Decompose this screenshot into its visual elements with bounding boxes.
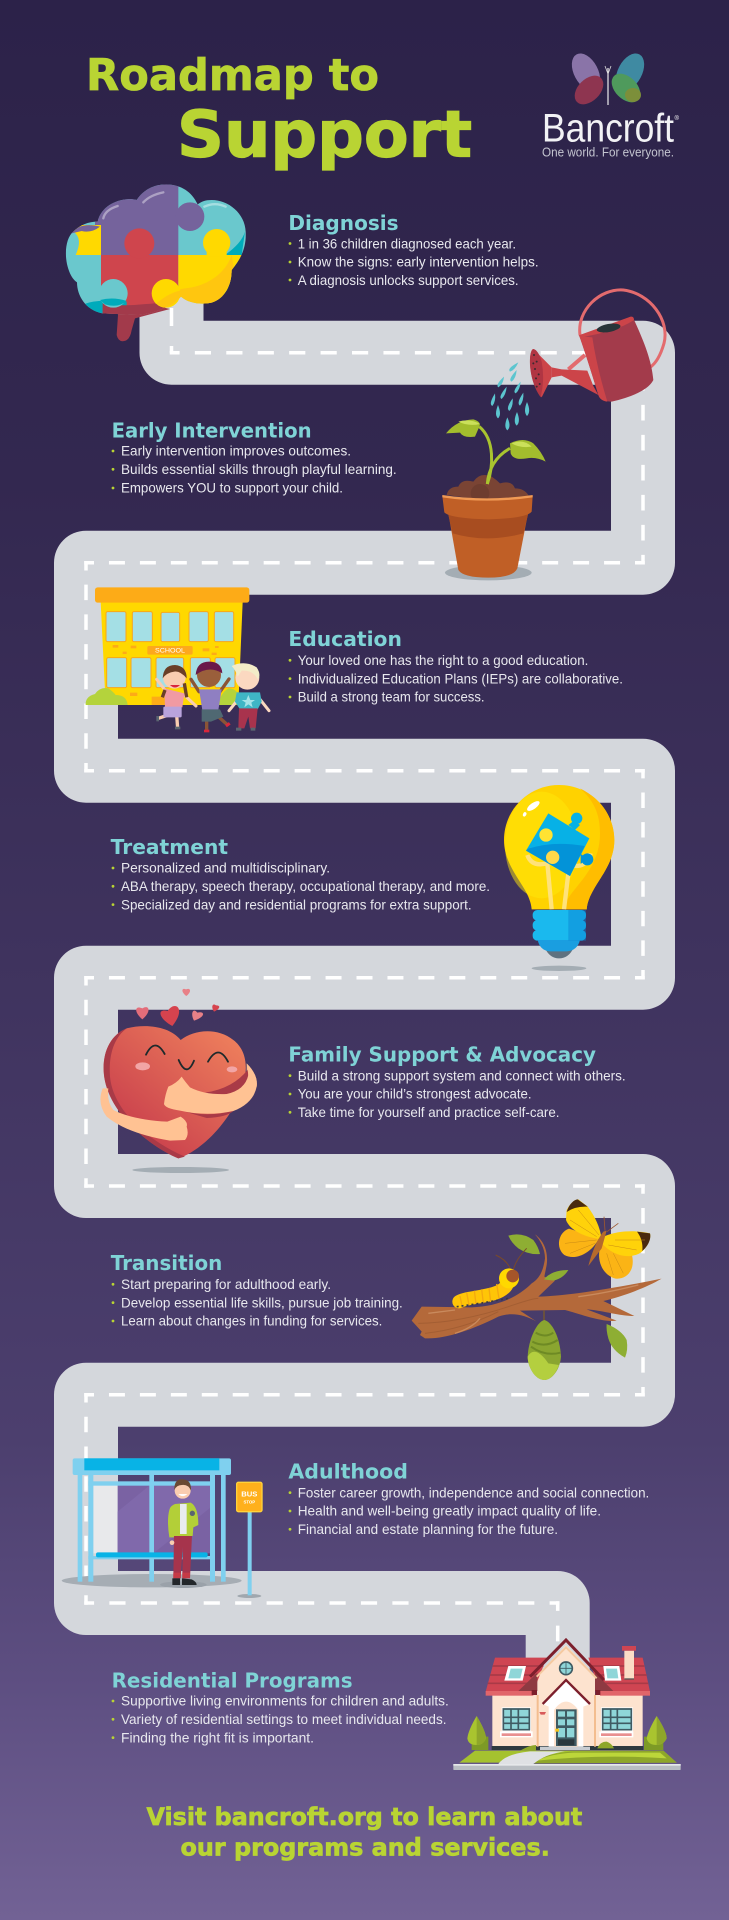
small floating hearts	[136, 989, 219, 1026]
bullet list: Builds essential skills through playful learning.	[121, 461, 397, 477]
child: blond boy	[229, 663, 269, 731]
bullet list	[112, 1276, 403, 1329]
bullet list	[289, 235, 539, 288]
title	[86, 50, 472, 173]
section: Adulthood	[288, 1459, 649, 1537]
branch	[412, 1234, 662, 1338]
bullet list: Financial and estate planning for the future.	[298, 1521, 558, 1537]
icon: house	[453, 1640, 681, 1770]
logo: Bancroft	[542, 49, 680, 160]
trees	[467, 1716, 667, 1750]
heading: Transition	[111, 1251, 222, 1275]
logo: Bancroft: Bancroft	[542, 107, 674, 151]
section: Education	[288, 627, 623, 705]
bullet list: Supportive living environments for children and adults.	[121, 1693, 449, 1709]
heading: Residential Programs	[112, 1668, 353, 1692]
bullet list: Build a strong team for success.	[298, 689, 485, 705]
heading: Family Support & Advocacy	[288, 1042, 596, 1066]
section: Treatment	[111, 835, 490, 912]
heading: Early Intervention	[112, 418, 312, 442]
bullet list: Know the signs: early intervention helps.	[298, 254, 539, 270]
icon: branch with caterpillar, chrysalis and butterfly	[412, 1199, 662, 1380]
leaves	[508, 1234, 627, 1358]
child: girl	[156, 665, 196, 729]
bullet list: Individualized Education Plans (IEPs) are collaborative.	[298, 670, 623, 686]
icon: school and children	[86, 587, 269, 732]
bullet list	[289, 1484, 649, 1537]
bullet list: Health and well-being greatly impact quality of life.	[298, 1503, 601, 1519]
bullet list	[112, 1693, 449, 1745]
bullet list: A diagnosis unlocks support services.	[298, 272, 519, 288]
bullet list: You are your child’s strongest advocate.	[298, 1086, 532, 1102]
title: Roadmap to	[86, 50, 379, 101]
bullet list	[289, 652, 623, 705]
side windows	[500, 1707, 633, 1751]
bullet list: Start preparing for adulthood early.	[121, 1276, 331, 1292]
icon: bus shelter with person	[62, 1458, 262, 1598]
butterfly	[559, 1199, 650, 1279]
dormer windows	[504, 1662, 621, 1681]
icon: hugging heart	[100, 989, 257, 1173]
section: Family Support and Advocacy	[288, 1042, 626, 1120]
icon: potted plant	[442, 419, 546, 580]
glass panel	[93, 1485, 212, 1553]
bullet list: Take time for yourself and practice self-care.	[298, 1104, 560, 1120]
icon: butterfly	[566, 49, 650, 110]
bullet list	[289, 1067, 626, 1120]
heading: Diagnosis	[288, 211, 399, 235]
bus stop sign	[237, 1482, 262, 1598]
section: Diagnosis	[288, 211, 539, 288]
walls	[492, 1645, 643, 1750]
call to action: our programs and services.	[180, 1834, 550, 1862]
bullet list: Finding the right fit is important.	[121, 1729, 314, 1745]
bus stop sign: BUS	[241, 1489, 257, 1498]
bullet list: Personalized and multidisciplinary.	[121, 860, 330, 876]
bullet list: Your loved one has the right to a good education.	[298, 652, 588, 668]
icon: light bulb with puzzle piece	[504, 785, 614, 971]
bullet list: Empowers YOU to support your child.	[121, 480, 343, 496]
chimney	[622, 1646, 636, 1680]
winding road	[86, 290, 643, 1720]
bullet list: Foster career growth, independence and social connection.	[298, 1484, 649, 1500]
bullet list	[112, 443, 397, 496]
roof	[486, 1640, 650, 1696]
icon: puzzle brain	[66, 184, 246, 342]
bullet list: 1 in 36 children diagnosed each year.	[298, 235, 516, 251]
school building	[86, 587, 249, 705]
bullet list: Early intervention improves outcomes.	[121, 443, 351, 459]
bullet list	[112, 860, 490, 912]
title: Support	[177, 99, 472, 173]
caterpillar	[457, 1248, 527, 1307]
logo: Bancroft: ®	[674, 115, 680, 122]
lawn and base	[453, 1751, 681, 1770]
chrysalis	[528, 1311, 561, 1380]
icon: watering can and water drops	[491, 290, 665, 430]
section: Transition	[111, 1251, 403, 1329]
heading: Adulthood	[288, 1459, 408, 1483]
child: boy in purple	[191, 662, 231, 732]
bus stop sign: STOP	[243, 1500, 255, 1505]
bullet list: Develop essential life skills, pursue job training.	[121, 1294, 403, 1310]
bullet list: ABA therapy, speech therapy, occupational therapy, and more.	[121, 878, 490, 894]
bullet list: Learn about changes in funding for services.	[121, 1313, 382, 1329]
call to action	[146, 1803, 582, 1862]
section: Early Intervention	[112, 418, 397, 496]
puzzle piece	[526, 813, 593, 876]
bullet list: Build a strong support system and connect with others.	[298, 1067, 626, 1083]
bullet list: Specialized day and residential programs for extra support.	[121, 896, 472, 912]
bullet list: Variety of residential settings to meet individual needs.	[121, 1711, 446, 1727]
heading: Treatment	[111, 835, 228, 859]
heading: Education	[288, 627, 402, 651]
person	[168, 1479, 198, 1585]
school building: SCHOOL	[155, 648, 185, 655]
section: Residential Programs	[112, 1668, 449, 1745]
logo: Bancroft: One world. For everyone.	[542, 145, 674, 160]
porch and door	[543, 1680, 590, 1747]
call to action: Visit bancroft.org to learn about	[146, 1803, 582, 1831]
